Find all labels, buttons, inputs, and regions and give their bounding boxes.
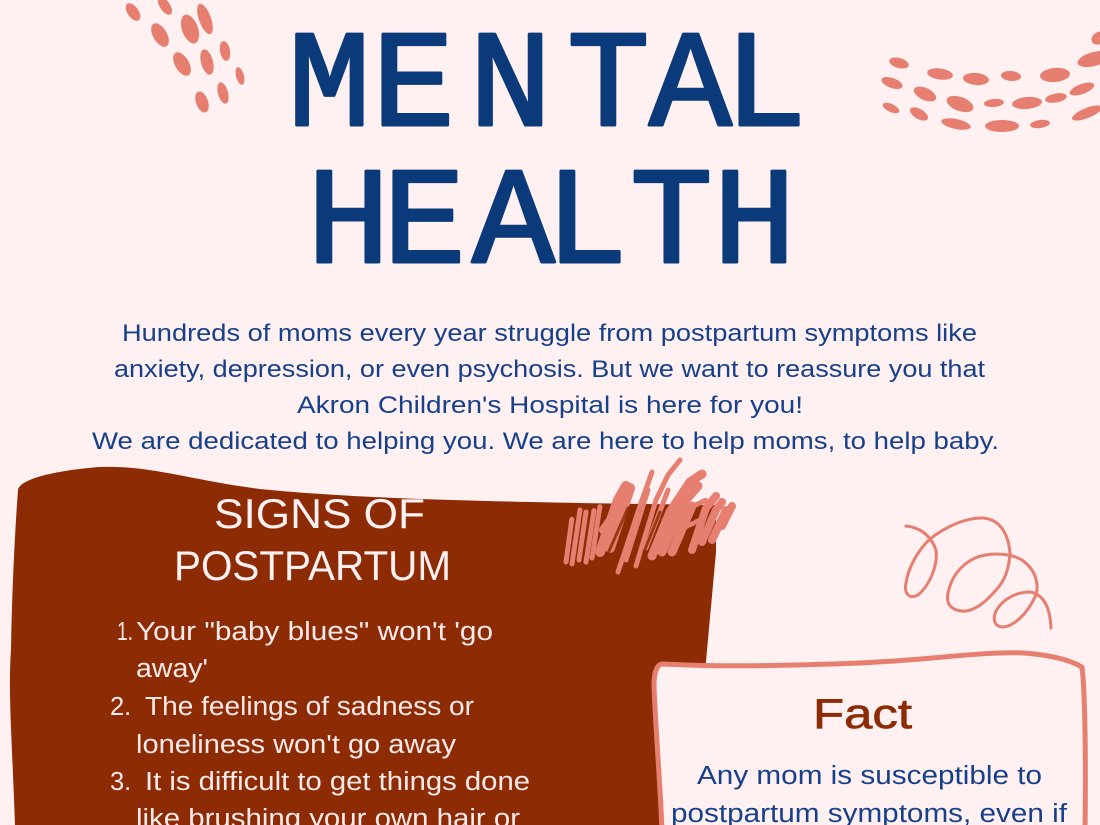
panel heading: SIGNS OF bbox=[214, 490, 425, 537]
intro paragraph: We are dedicated to helping you. We are here to help moms, to help baby. bbox=[92, 428, 999, 455]
fact body text: Any mom is susceptible to bbox=[697, 762, 1042, 790]
panel: fact card bbox=[654, 653, 1085, 825]
numbered list of signs bbox=[110, 618, 530, 825]
numbered list of signs: 1. bbox=[117, 618, 133, 646]
numbered list of signs: 2. bbox=[110, 693, 131, 721]
numbered list of signs: Your "baby blues" won't 'go bbox=[136, 618, 493, 646]
decorative dashes: top right bbox=[880, 29, 1100, 132]
numbered list of signs: 3. bbox=[110, 768, 131, 796]
intro paragraph: anxiety, depression, or even psychosis. But we want to reassure you that bbox=[114, 356, 985, 383]
panel background shape bbox=[10, 467, 716, 825]
numbered list of signs: away' bbox=[136, 655, 208, 683]
fact heading: Fact bbox=[813, 690, 912, 737]
decorative pink scribble bbox=[566, 460, 732, 572]
decorative swirl bbox=[906, 518, 1051, 628]
title: HEALTH bbox=[307, 148, 796, 304]
numbered list of signs: It is difficult to get things done bbox=[145, 768, 530, 796]
panel heading bbox=[174, 490, 451, 589]
intro paragraph: Akron Children's Hospital is here for you! bbox=[297, 392, 803, 419]
numbered list of signs: loneliness won't go away bbox=[136, 731, 456, 759]
intro paragraph bbox=[92, 320, 999, 455]
intro paragraph: Hundreds of moms every year struggle from postpartum symptoms like bbox=[122, 320, 977, 347]
fact body text bbox=[671, 762, 1068, 825]
decorative dots: top left bbox=[123, 0, 246, 114]
numbered list of signs: The feelings of sadness or bbox=[145, 693, 475, 721]
fact card frame bbox=[654, 653, 1085, 825]
panel heading: POSTPARTUM bbox=[174, 542, 451, 589]
title: MENTAL bbox=[288, 11, 807, 167]
panel: signs of postpartum bbox=[10, 467, 716, 825]
title bbox=[288, 11, 807, 304]
